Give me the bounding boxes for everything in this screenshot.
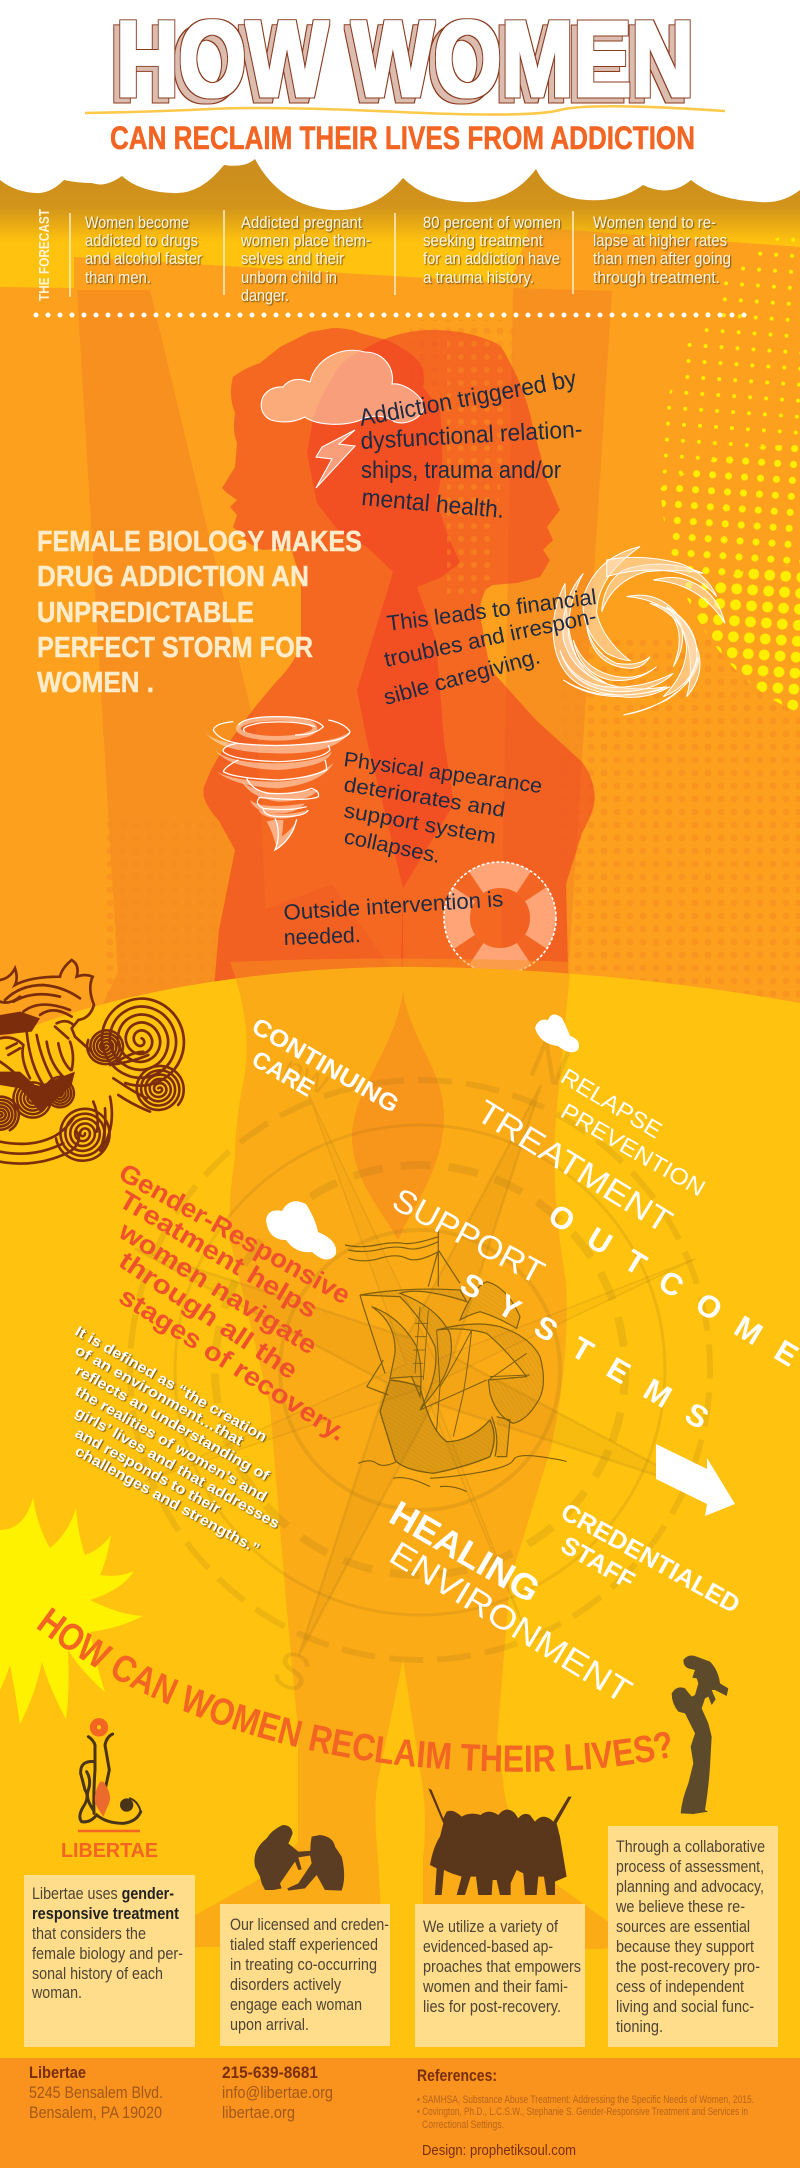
dark caption 3: physical [342, 748, 544, 868]
footer: contact: info@libertae.org [222, 2083, 333, 2102]
heading: gender-responsive treatment: stages of recovery. [114, 1281, 352, 1447]
dark caption 1: triggers: Addiction triggered by [357, 365, 578, 432]
label: credentialed staff: CREDENTIALED [556, 1498, 745, 1619]
forecast fact 1: Women become [85, 213, 189, 232]
footer: address: Libertae [29, 2063, 86, 2082]
dotted divider [36, 312, 755, 318]
panel: staff: in treating co-occurring [230, 1955, 377, 1974]
halftone band over heads [447, 340, 513, 600]
label: credentialed staff: STAFF [556, 1531, 639, 1595]
forecast fact 4: Women tend to re- [593, 213, 716, 232]
icon: tornado [205, 717, 350, 850]
illustration: wind god Neptune [0, 960, 196, 1165]
heading: female biology [37, 526, 362, 699]
forecast fact 3: a trauma history. [423, 268, 534, 287]
compass rose watermark [0, 917, 800, 1820]
footer: address: Bensalem, PA 19020 [29, 2103, 162, 2122]
label: relapse prevention: RELAPSE [556, 1063, 667, 1143]
silhouette: woman facing left [203, 328, 460, 1010]
forecast fact 2 [240, 213, 371, 305]
label: relapse prevention: PREVENTION [556, 1098, 710, 1201]
panel: approaches: evidenced-based ap- [423, 1937, 553, 1956]
dark caption 1: triggers [357, 365, 583, 524]
label: relapse prevention [556, 1063, 710, 1201]
label: support systems [387, 1181, 734, 1447]
footer: address [29, 2063, 163, 2122]
halftone yellow dots [660, 237, 800, 711]
dark caption 2: consequences [381, 584, 598, 710]
illustration: sailing ship [345, 1230, 567, 1492]
curved heading: how can women reclaim their lives: HOW CAN WOMEN RECLAIM THEIR LIVES? [36, 1607, 670, 1772]
panel: approaches: women and their fami- [422, 1977, 568, 1996]
panel: collaborative process: cess of independent [616, 1977, 744, 1996]
dark caption 2: consequences: troubles and irrespon- [382, 603, 598, 672]
footer: contact: 215-639-8681 [222, 2063, 318, 2082]
footer: design credit: Design: prophetiksoul.com [422, 2142, 576, 2159]
footer: contact [222, 2063, 333, 2122]
forecast fact 2: women place them- [240, 231, 371, 250]
forecast fact 1: than men. [85, 268, 151, 287]
panel: collaborative process: the post-recovery pro- [616, 1957, 760, 1976]
panel: staff: engage each woman [230, 1995, 362, 2014]
panel: staff: upon arrival. [230, 2015, 309, 2034]
forecast fact 3 [423, 213, 561, 287]
icon: sun [0, 1498, 143, 1724]
definition text: and responds to their [72, 1425, 223, 1518]
panel: libertae: responsive treatment [32, 1904, 179, 1923]
definition text [72, 1324, 282, 1558]
icon: lifebuoy [444, 862, 556, 974]
heading: gender-responsive treatment: through all the [114, 1245, 304, 1385]
compass rose watermark: N [521, 1030, 578, 1098]
forecast fact 2: selves and their [241, 249, 344, 268]
dark caption 1: triggers: ships, trauma and/or [361, 457, 561, 484]
logo rule [78, 1830, 140, 1832]
footer: references [417, 2066, 754, 2131]
panel: collaborative process: planning and advocacy, [616, 1877, 764, 1896]
panel: libertae: woman. [31, 1983, 82, 2002]
footer [0, 2058, 800, 2168]
definition text: challenges and strengths.” [72, 1443, 262, 1558]
dark caption 4: intervention: Outside intervention is [283, 886, 504, 925]
compass rose watermark: nw [277, 1047, 336, 1103]
panel: collaborative process: living and social func- [616, 1997, 754, 2016]
panel: libertae [24, 1875, 195, 2047]
silhouette: group of women [428, 1788, 572, 1895]
heading: female biology: WOMEN . [37, 667, 154, 699]
icon: hurricane spiral [553, 547, 725, 715]
forecast fact 4 [593, 213, 731, 287]
definition text: It is defined as “the creation [72, 1324, 269, 1445]
footer: references: References: [417, 2066, 497, 2085]
dark caption 3: physical: support system [342, 799, 498, 849]
yellow ground [0, 967, 800, 2168]
heading: female biology: UNPREDICTABLE [37, 597, 254, 629]
panel: staff [220, 1904, 390, 2046]
panel: libertae: that considers the [32, 1924, 146, 1943]
heading: gender-responsive treatment: Gender-Responsive [114, 1157, 356, 1310]
panel: approaches: proaches that empowers [423, 1957, 581, 1976]
definition text: of an environment…that [72, 1343, 246, 1450]
panel: libertae: Libertae uses gender- [32, 1884, 174, 1903]
dark caption 1: triggers: dysfunctional relation- [360, 416, 583, 455]
panel: staff: Our licensed and creden- [230, 1915, 389, 1934]
compass rose watermark: S [265, 1638, 319, 1705]
forecast dividers [70, 210, 573, 297]
label: treatment outcome [470, 1092, 800, 1384]
label: healing environment: HEALING [383, 1492, 547, 1611]
icon: storm cloud with lightning [261, 350, 424, 488]
forecast fact 1 [85, 213, 202, 287]
silhouette: mother lifting child [672, 1656, 728, 1814]
panel: staff: disorders actively [230, 1975, 341, 1994]
heading: female biology: DRUG ADDICTION AN [37, 561, 309, 593]
definition text: reflects an understanding of [72, 1363, 272, 1485]
label: continuing care: CONTINUING [247, 1013, 403, 1119]
heading: gender-responsive treatment: women navigate [113, 1215, 323, 1360]
legs silhouette [158, 958, 629, 1949]
label: healing environment: ENVIRONMENT [383, 1534, 638, 1711]
forecast fact 4: through treatment. [593, 268, 720, 287]
forecast fact 3: 80 percent of women [423, 213, 561, 232]
dark caption 2: consequences: This leads to financial [385, 584, 598, 636]
heading: gender-responsive treatment: Treatment helps [114, 1184, 323, 1324]
neptune hair and face [0, 960, 94, 1112]
dark caption 3: physical: Physical appearance [342, 748, 544, 798]
definition text: girls’ lives and that addresses [72, 1405, 282, 1532]
forecast fact 1: addicted to drugs [85, 231, 198, 250]
panel: libertae: sonal history of each [32, 1964, 163, 1983]
panel: collaborative process [608, 1826, 778, 2047]
title underline [85, 106, 725, 115]
cloud top: white scalloped header [0, 0, 800, 210]
forecast fact 2: unborn child in [241, 268, 337, 287]
dark caption 4: intervention [283, 886, 504, 950]
panel: collaborative process: Through a collaborative [616, 1837, 765, 1856]
forecast fact 1: and alcohol faster [85, 249, 202, 268]
dark caption 4: intervention: needed. [283, 922, 361, 950]
dark caption 3: physical: collapses. [342, 825, 443, 868]
label: support systems: SYSTEMS [454, 1266, 734, 1447]
panel: collaborative process: sources are essential [616, 1917, 750, 1936]
footer: address: 5245 Bensalem Blvd. [29, 2083, 163, 2102]
label: treatment outcome: TREATMENT [470, 1092, 679, 1240]
logo emblem [80, 1722, 141, 1823]
forecast fact 2: danger. [241, 286, 289, 305]
logo word: LIBERTAE [61, 1840, 158, 1862]
panel: approaches: We utilize a variety of [423, 1917, 558, 1936]
arrow [656, 1444, 735, 1516]
forecast fact 3: seeking treatment [423, 231, 543, 250]
logo: Libertae [61, 1722, 158, 1862]
panel: collaborative process: we believe these re- [615, 1897, 745, 1916]
label: support systems: SUPPORT [387, 1181, 551, 1291]
label: healing environment [383, 1492, 638, 1711]
label: continuing care: CARE [247, 1046, 319, 1103]
panel: collaborative process: process of assessment, [616, 1857, 764, 1876]
forecast fact 3: for an addiction have [423, 249, 560, 268]
heading: female biology: FEMALE BIOLOGY MAKES [37, 526, 362, 558]
panel: collaborative process: tioning. [616, 2017, 663, 2036]
panel: collaborative process: because they support [616, 1937, 754, 1956]
panel: approaches: lies for post-recovery. [423, 1997, 561, 2016]
footer: references: Correctional Settings. [422, 2119, 504, 2131]
panel: staff: tialed staff experienced [230, 1935, 378, 1954]
panel: libertae: female biology and per- [32, 1944, 183, 1963]
forecast fact 2: Addicted pregnant [241, 213, 362, 232]
forecast fact 4: lapse at higher rates [593, 231, 727, 250]
dark caption 3: physical: deteriorates and [342, 773, 507, 822]
forecast fact 4: than men after going [593, 249, 731, 268]
heading: gender-responsive treatment [113, 1157, 356, 1447]
white cloud [266, 1201, 336, 1260]
footer: contact: libertae.org [222, 2103, 295, 2122]
panel: approaches [415, 1904, 585, 2047]
heading: female biology: PERFECT STORM FOR [37, 632, 313, 664]
dark caption 2: consequences: sible caregiving. [381, 643, 543, 710]
dark caption 1: triggers: mental health. [360, 484, 505, 524]
label: the forecast: THE FORECAST [36, 209, 53, 301]
silhouette: two women comforting [254, 1825, 344, 1891]
small white cloud [535, 1014, 579, 1052]
silhouette: woman facing right [307, 330, 595, 1010]
definition text: the realities of women’s and [72, 1384, 269, 1505]
